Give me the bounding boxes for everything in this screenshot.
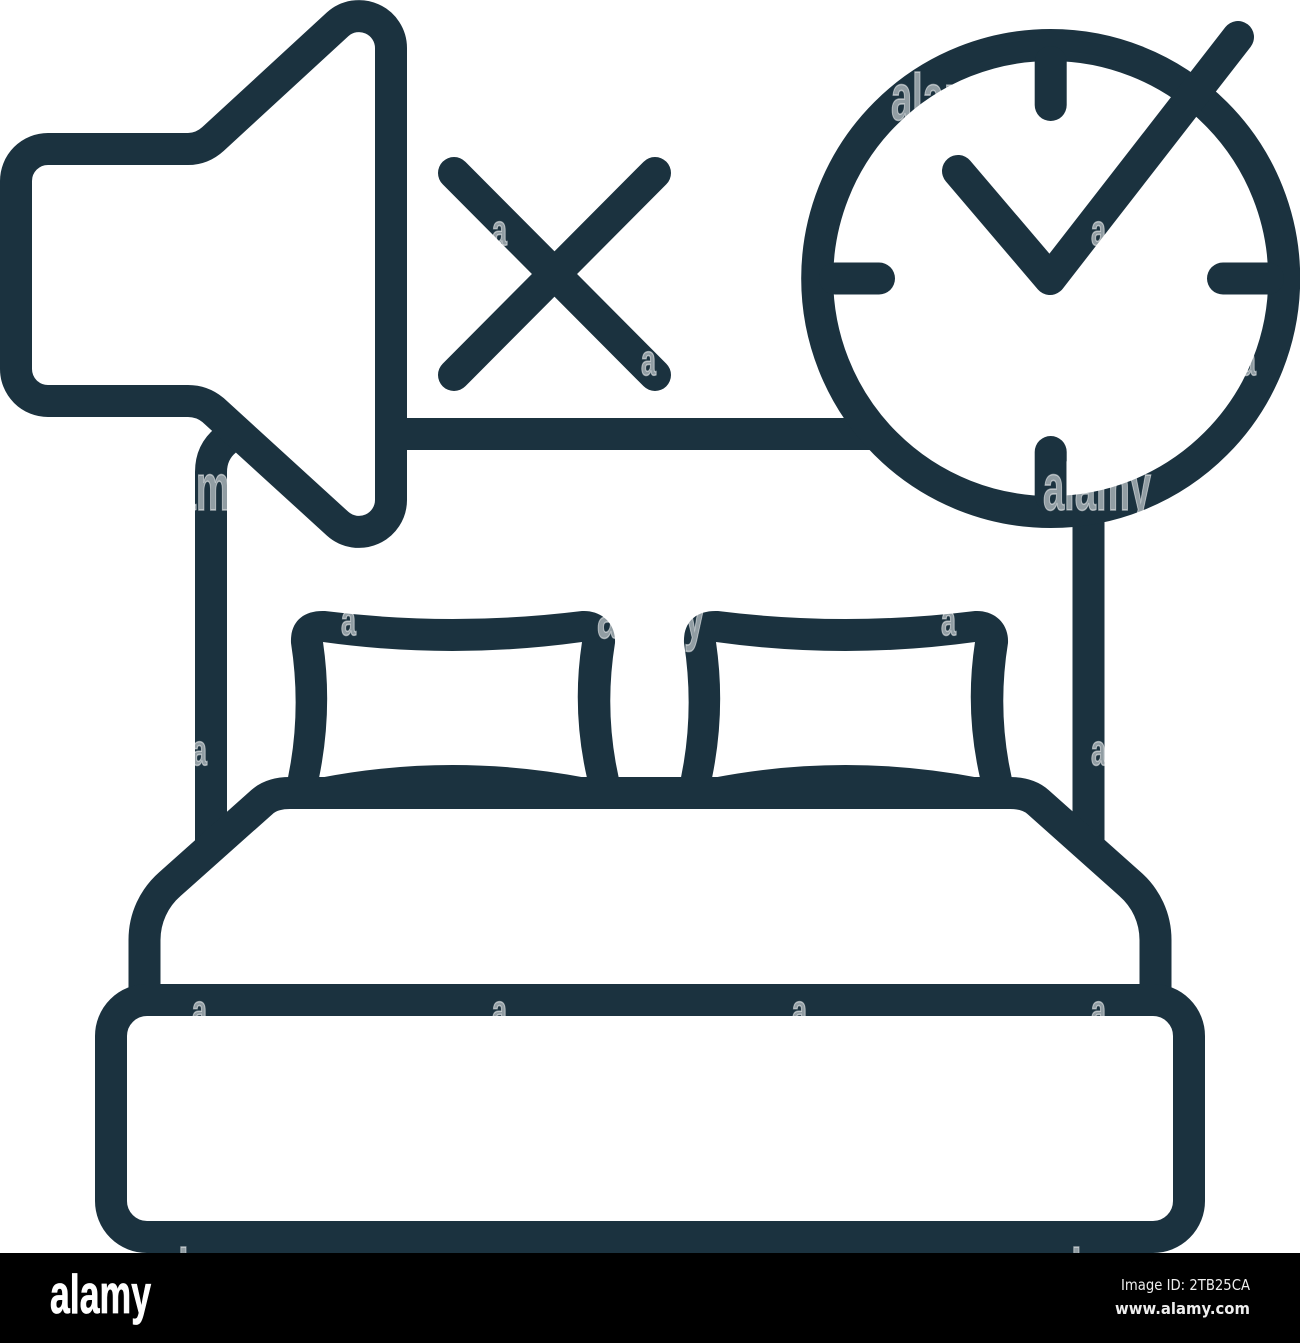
watermark: alamy	[1050, 1235, 1158, 1309]
left pillow	[284, 611, 623, 795]
watermark	[143, 60, 1256, 1309]
watermark: a	[192, 986, 207, 1035]
icon: bed and headboard	[111, 434, 1189, 1237]
logo text: alamy	[50, 1263, 151, 1325]
watermark: a	[641, 336, 656, 385]
watermark: a	[1241, 336, 1256, 385]
icon: mute cross	[454, 173, 655, 375]
watermark: alamy	[891, 60, 999, 134]
clock face	[817, 45, 1284, 512]
watermark: alamy	[157, 1235, 265, 1309]
watermark: alamy	[597, 578, 705, 652]
headboard frame	[211, 434, 1088, 845]
icon: speaker	[16, 16, 391, 532]
watermark: a	[341, 596, 356, 645]
watermark: alamy	[143, 450, 251, 524]
website: www.alamy.com	[1115, 1299, 1250, 1318]
watermark: a	[1091, 726, 1106, 775]
watermark: a	[1091, 206, 1106, 255]
watermark: alamy	[1043, 450, 1151, 524]
mattress	[144, 793, 1156, 990]
image id: Image ID: 2TB25CA	[1121, 1276, 1251, 1294]
watermark: a	[492, 986, 507, 1035]
hour ticks	[835, 62, 1268, 495]
watermark: a	[192, 726, 207, 775]
watermark: a	[1091, 986, 1106, 1035]
bed base	[111, 1000, 1189, 1237]
watermark: a	[792, 986, 807, 1035]
icon: clock with check mark	[817, 37, 1284, 512]
stock photo footer bar	[0, 1253, 1300, 1343]
check mark hands	[958, 37, 1238, 279]
watermark: a	[941, 596, 956, 645]
watermark: a	[492, 206, 507, 255]
right pillow	[677, 611, 1016, 795]
